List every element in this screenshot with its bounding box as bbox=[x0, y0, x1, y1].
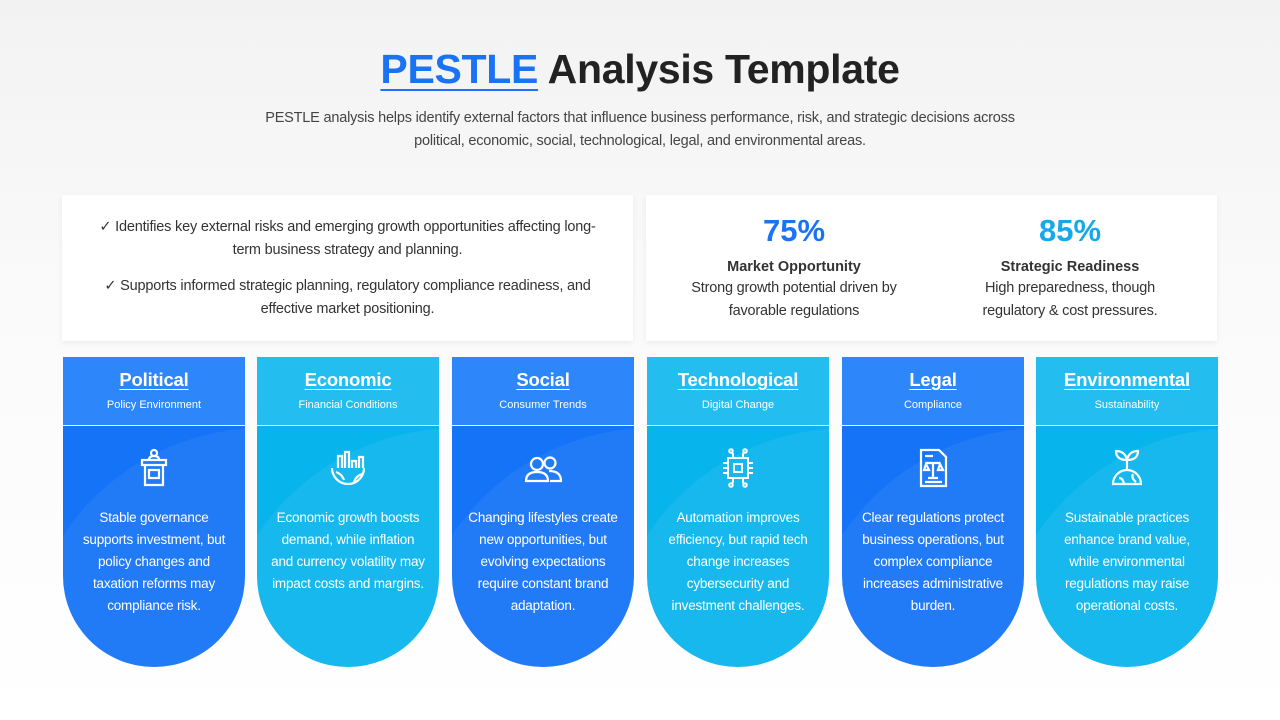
icon: chip bbox=[723, 448, 753, 488]
card: political: Policy Environment bbox=[107, 399, 201, 411]
card: environmental: Sustainability bbox=[1095, 399, 1159, 411]
title: PESTLE Analysis Template bbox=[380, 46, 900, 92]
card: social: Changing lifestyles create new opportunities, but evolving expectations require constant brand adaptation. bbox=[468, 510, 618, 613]
card: legal bbox=[842, 357, 1024, 667]
stat: strategic readiness: High preparedness, though regulatory & cost pressures. bbox=[983, 280, 1157, 319]
card: technological: Digital Change bbox=[702, 399, 774, 411]
point 1: ✓ Identifies key external risks and emerging growth opportunities affecting long-term business strategy and planning. bbox=[99, 219, 596, 258]
card: economic bbox=[257, 357, 439, 667]
subtitle: PESTLE analysis helps identify external factors that influence business performance, risk, and strategic decisions across political, economic, social, technological, legal, and environmental areas. bbox=[265, 110, 1015, 149]
icon: podium bbox=[140, 448, 168, 486]
card: environmental bbox=[1036, 357, 1218, 667]
card: legal: Legal bbox=[909, 369, 957, 390]
icon: plant globe bbox=[1112, 450, 1142, 486]
card: technological: Automation improves efficiency, but rapid tech change increases cybersecurity and investment challenges. bbox=[668, 510, 808, 613]
card: environmental: Sustainable practices enhance brand value, while environmental regulations may raise operational costs. bbox=[1064, 510, 1190, 613]
stat: strategic readiness: Strategic Readiness bbox=[1001, 259, 1139, 275]
card: legal: Clear regulations protect business operations, but complex compliance increases administrative burden. bbox=[862, 510, 1004, 613]
card: political: Stable governance supports investment, but policy changes and taxation reforms may compliance risk. bbox=[83, 510, 225, 613]
card: economic: Economic bbox=[305, 369, 391, 390]
card: technological bbox=[647, 357, 829, 667]
card: social: Consumer Trends bbox=[499, 399, 587, 411]
icon: globe chart bbox=[330, 450, 366, 486]
card: social bbox=[452, 357, 634, 667]
stat: market opportunity: Market Opportunity bbox=[727, 259, 861, 275]
card: environmental: Environmental bbox=[1064, 369, 1190, 390]
card: economic: Economic growth boosts demand, while inflation and currency volatility may impact costs and margins. bbox=[271, 510, 425, 591]
panel: key points bbox=[62, 195, 633, 341]
stat: strategic readiness: 85% bbox=[1039, 213, 1101, 248]
stat: market opportunity: 75% bbox=[763, 213, 825, 248]
card: political: Political bbox=[119, 369, 189, 390]
card: legal: Compliance bbox=[904, 399, 962, 411]
stat: market opportunity bbox=[691, 213, 897, 319]
card: political bbox=[63, 357, 245, 667]
card: economic: Financial Conditions bbox=[298, 399, 398, 411]
card: technological: Technological bbox=[678, 369, 798, 390]
point 2: ✓ Supports informed strategic planning, regulatory compliance readiness, and effective market positioning. bbox=[104, 278, 591, 317]
icon: legal document bbox=[920, 448, 948, 488]
card: social: Social bbox=[516, 369, 570, 390]
panel: stats bbox=[646, 195, 1217, 341]
stat: strategic readiness bbox=[983, 213, 1157, 319]
icon: people bbox=[524, 456, 562, 482]
stat: market opportunity: Strong growth potential driven by favorable regulations bbox=[691, 280, 897, 319]
